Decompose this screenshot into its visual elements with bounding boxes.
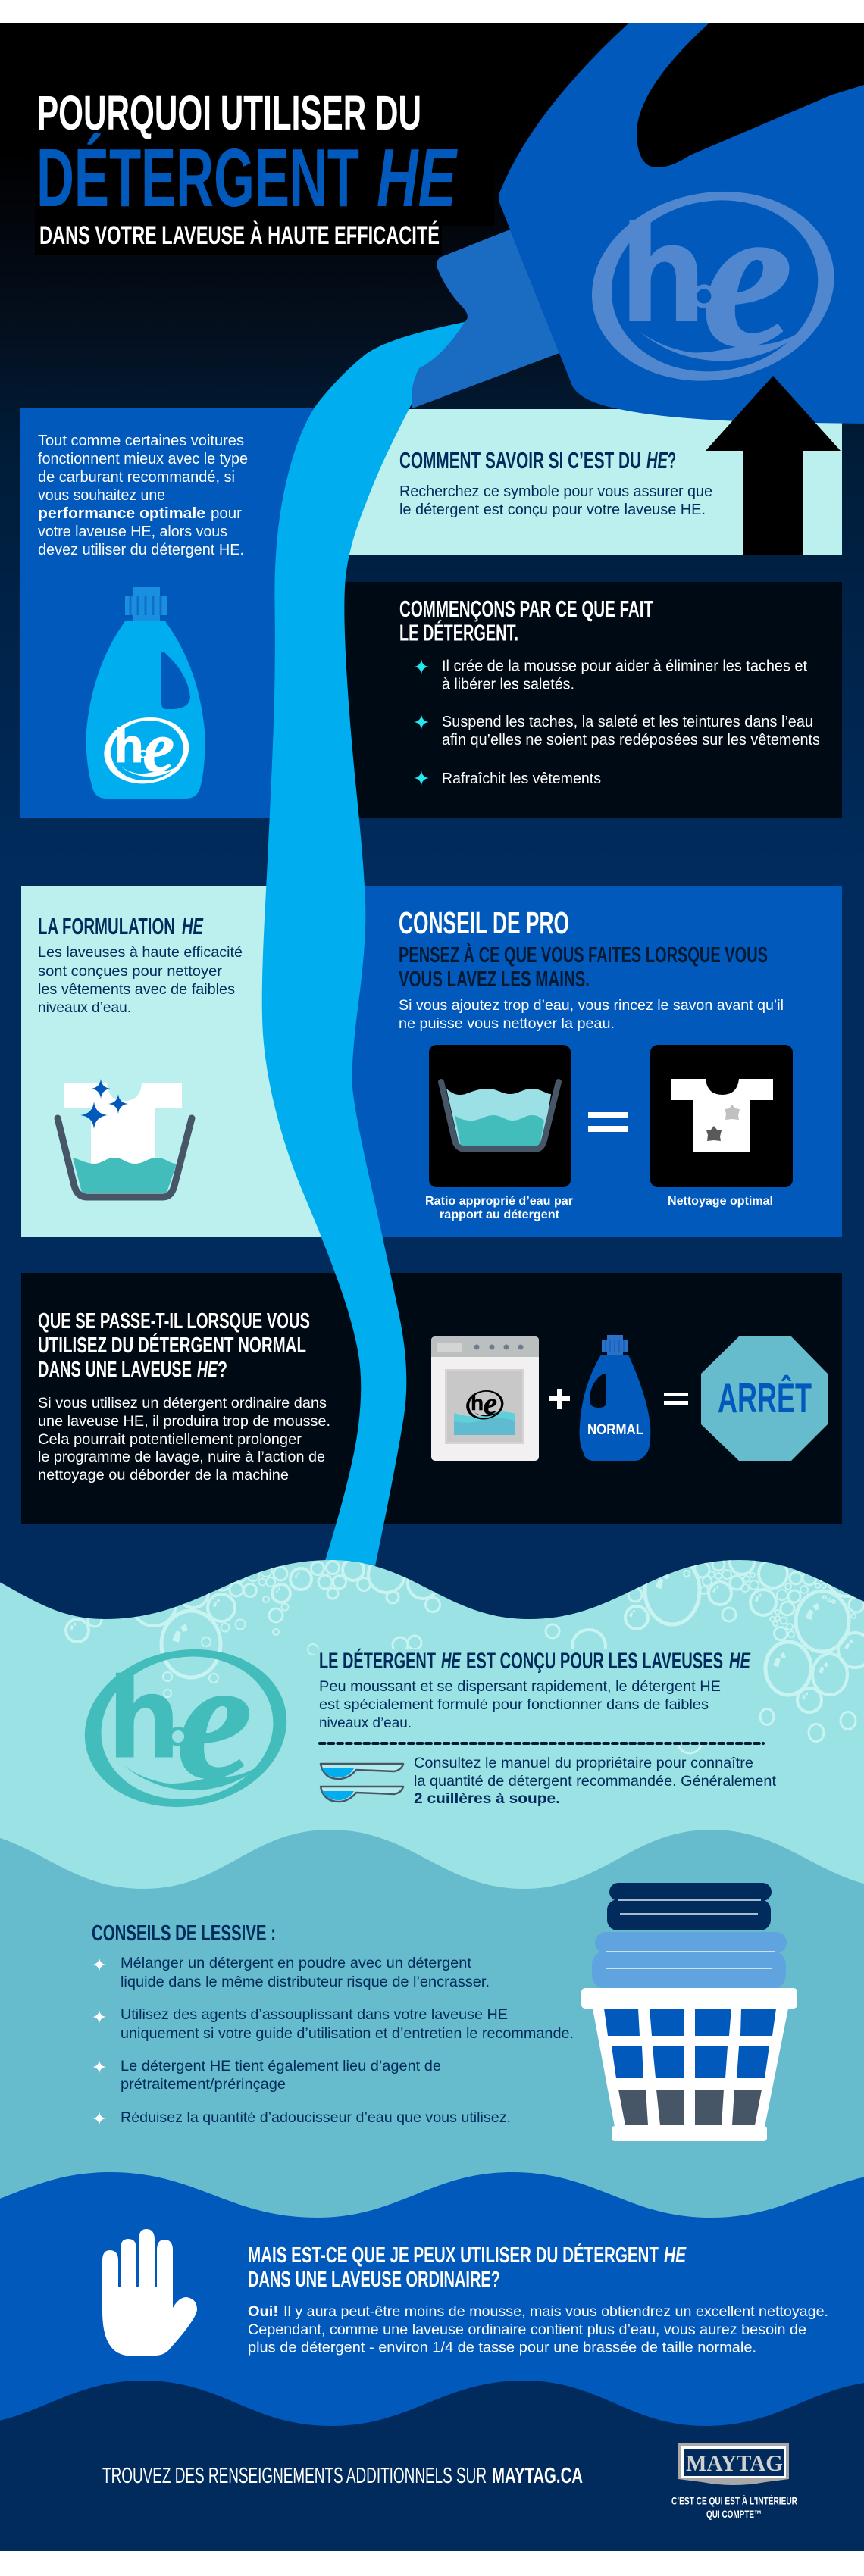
equals sign xyxy=(588,1112,628,1132)
wave: blue band xyxy=(0,2172,864,2440)
text: can I use HE in ordinary washer: Oui! xyxy=(248,2303,278,2320)
text: formulation: niveaux d’eau. xyxy=(38,999,131,1016)
text: normal detergent in HE washer: Cela pourrait potentiellement prolonger xyxy=(38,1431,302,1448)
icon: washer: e xyxy=(484,1386,497,1421)
bottle spout xyxy=(412,230,559,408)
text: how to know: HE xyxy=(646,447,668,474)
icon: small detergent bottle: h xyxy=(114,720,143,773)
text: formulation xyxy=(38,913,243,1016)
icon: raised hand xyxy=(102,2229,197,2356)
text: intro: performance optimale xyxy=(38,505,205,522)
text: can I use HE in ordinary washer: Il y aura peut-être moins de mousse, mais vous obtiendrez un excellent nettoyage. xyxy=(283,2303,828,2320)
title: HE xyxy=(377,132,458,224)
equals sign xyxy=(664,1393,688,1405)
text: laundry tips: Utilisez des agents d’assouplissant dans votre laveuse HE xyxy=(121,2006,508,2023)
text: HE detergent designed for HE washers: EST CONÇU POUR LES LAVEUSES xyxy=(466,1649,723,1674)
title xyxy=(35,86,494,255)
text: can I use HE in ordinary washer: DANS UNE LAVEUSE ORDINAIRE? xyxy=(248,2268,500,2292)
Maytag logo: MAYTAG xyxy=(686,2449,783,2476)
text: laundry tips: prétraitement/prérinçage xyxy=(121,2076,286,2093)
text: what the detergent does: Rafraîchit les vêtements xyxy=(442,771,601,787)
text: what the detergent does xyxy=(399,596,820,787)
panel: what detergent does xyxy=(333,582,842,818)
text: how to know: Recherchez ce symbole pour vous assurer que xyxy=(399,483,712,500)
captions xyxy=(425,1195,773,1221)
text: formulation: les vêtements avec de faibles xyxy=(38,981,235,998)
text: normal detergent in HE washer: ? xyxy=(218,1358,227,1382)
text: footer call to action: TROUVEZ DES RENSEIGNEMENTS ADDITIONNELS SUR xyxy=(102,2464,487,2488)
text: laundry tips: Mélanger un détergent en poudre avec un détergent xyxy=(121,1955,472,1971)
title: DÉTERGENT xyxy=(36,132,359,224)
icon: small detergent bottle xyxy=(86,587,205,799)
text: laundry tips: liquide dans le même distributeur risque de l’encrasser. xyxy=(121,1974,490,1990)
card: water ratio basin xyxy=(429,1045,571,1187)
captions: Nettoyage optimal xyxy=(668,1195,773,1208)
text: pro tip: VOUS LAVEZ LES MAINS. xyxy=(399,968,590,992)
text: intro: Tout comme certaines voitures xyxy=(38,433,244,449)
icon: large HE logo: h xyxy=(109,1653,179,1780)
panel: normal detergent dark xyxy=(21,1273,842,1524)
text: how to know: COMMENT SAVOIR SI C’EST DU xyxy=(399,447,641,474)
arrow pointing to symbol xyxy=(706,376,841,555)
text: tablespoons xyxy=(414,1755,777,1807)
text: can I use HE in ordinary washer: Cependant, comme une laveuse ordinaire contient plus d’eau, vous aurez besoin de xyxy=(248,2321,806,2338)
Maytag logo xyxy=(678,2443,789,2485)
text: pro tip: Si vous ajoutez trop d’eau, vous rincez le savon avant qu’il xyxy=(399,997,784,1014)
icon: washer xyxy=(431,1336,539,1461)
text: intro: votre laveuse HE, alors vous xyxy=(38,524,227,540)
icon: HE logo on large bottle: e xyxy=(702,163,793,389)
panel: formulation pale xyxy=(21,886,340,1237)
text: normal detergent in HE washer: QUE SE PASSE-T-IL LORSQUE VOUS xyxy=(38,1309,310,1333)
text: can I use HE in ordinary washer: plus de détergent - environ 1/4 de tasse pour une brassée de taille normale. xyxy=(248,2340,756,2356)
text: laundry tips: Le détergent HE tient également lieu d’agent de xyxy=(121,2058,441,2074)
text: normal detergent in HE washer: le programme de lavage, nuire à l’action de xyxy=(38,1449,325,1465)
text: intro: vous souhaitez une xyxy=(38,487,165,504)
text: HE detergent designed for HE washers: est spécialement formulé pour fonctionner dans de faibles xyxy=(319,1696,709,1713)
text: tablespoons: la quantité de détergent recommandée. Généralement xyxy=(414,1773,777,1790)
stop sign xyxy=(701,1336,828,1461)
text: normal detergent in HE washer: une laveuse HE, il produira trop de mousse. xyxy=(38,1413,330,1430)
text: HE detergent designed for HE washers: HE xyxy=(441,1649,462,1674)
text: can I use HE in ordinary washer: MAIS EST-CE QUE JE PEUX UTILISER DU DÉTERGENT xyxy=(248,2242,659,2268)
Maytag tagline: QUI COMPTE™ xyxy=(706,2508,762,2520)
text: intro: fonctionnent mieux avec le type xyxy=(38,451,248,467)
text: HE detergent designed for HE washers: LE DÉTERGENT xyxy=(319,1648,436,1674)
text: pro tip: CONSEIL DE PRO xyxy=(399,905,569,940)
panel: intro blue xyxy=(20,408,330,818)
text: intro: devez utiliser du détergent HE. xyxy=(38,542,244,558)
text: how to know: le détergent est conçu pour votre laveuse HE. xyxy=(399,502,706,518)
text: what the detergent does: afin qu’elles ne soient pas redéposées sur les vêtements xyxy=(442,732,820,749)
Maytag tagline xyxy=(671,2494,797,2520)
icon: normal detergent bottle xyxy=(580,1335,650,1461)
text: laundry tips: uniquement si votre guide d’utilisation et d’entretien le recommande. xyxy=(121,2025,574,2042)
text: HE detergent designed for HE washers: niveaux d’eau. xyxy=(319,1715,412,1731)
icon: laundry basket with folded clothes xyxy=(581,1883,797,2141)
icons: white sparkle bullets xyxy=(92,1958,106,2125)
text: normal detergent in HE washer xyxy=(38,1309,330,1483)
icon: HE logo on large bottle: h xyxy=(621,197,705,349)
text: pro tip xyxy=(399,905,784,1032)
Maytag tagline: C’EST CE QUI EST À L’INTÉRIEUR xyxy=(671,2494,797,2506)
text: can I use HE in ordinary washer xyxy=(248,2242,828,2356)
text backing block xyxy=(315,1649,758,1745)
text: intro xyxy=(38,433,248,558)
text: laundry tips: Réduisez la quantité d’adoucisseur d’eau que vous utilisez. xyxy=(121,2109,511,2126)
text: what the detergent does: COMMENÇONS PAR CE QUE FAIT xyxy=(399,596,653,622)
text: what the detergent does: Suspend les taches, la saleté et les teintures dans l’eau xyxy=(442,714,813,730)
soap wave xyxy=(0,1560,864,1894)
text: tablespoons: Consultez le manuel du propriétaire pour connaître xyxy=(414,1755,753,1771)
text: normal detergent in HE washer: Si vous utilisez un détergent ordinaire dans xyxy=(38,1395,327,1411)
text: laundry tips: CONSEILS DE LESSIVE : xyxy=(92,1921,276,1946)
text: normal detergent in HE washer: HE xyxy=(197,1358,218,1382)
bubbles xyxy=(66,1550,864,1753)
plus sign xyxy=(549,1389,570,1409)
text: formulation: Les laveuses à haute efficacité xyxy=(38,944,243,961)
panel: how to know pale xyxy=(333,409,842,555)
icons: cyan sparkle bullets xyxy=(414,659,429,786)
icon: large HE logo xyxy=(72,1624,299,1823)
captions: rapport au détergent xyxy=(440,1208,559,1221)
icon: large HE logo: e xyxy=(177,1624,252,1814)
text: formulation: sont conçues pour nettoyer xyxy=(38,963,223,980)
title: POURQUOI UTILISER DU xyxy=(37,86,421,140)
wave: footer xyxy=(0,2381,864,2551)
panel: pro tip blue xyxy=(333,886,842,1237)
wave: laundry tips band xyxy=(0,1830,864,2235)
text: what the detergent does: à libérer les saletés. xyxy=(442,676,574,692)
text: normal detergent in HE washer: nettoyage ou déborder de la machine xyxy=(38,1467,289,1483)
text: laundry tips xyxy=(92,1921,574,2126)
text: intro: de carburant recommandé, si xyxy=(38,469,235,486)
text: normal detergent in HE washer: UTILISEZ DU DÉTERGENT NORMAL xyxy=(38,1332,306,1358)
text: normal detergent in HE washer: DANS UNE LAVEUSE xyxy=(38,1358,192,1382)
icon: washer: h xyxy=(471,1391,484,1415)
text: tablespoons: 2 cuillères à soupe. xyxy=(414,1790,560,1807)
card: clean shirt xyxy=(650,1045,793,1187)
text: formulation: LA FORMULATION xyxy=(38,913,175,939)
text: HE detergent designed for HE washers: HE xyxy=(729,1649,751,1674)
text: what the detergent does: LE DÉTERGENT. xyxy=(399,620,518,646)
large pouring bottle xyxy=(499,23,864,424)
icon: small detergent bottle: e xyxy=(142,708,174,787)
text: HE detergent designed for HE washers: Peu moussant et se dispersant rapidement, le détergent HE xyxy=(319,1678,721,1695)
text: can I use HE in ordinary washer: HE xyxy=(664,2243,687,2268)
text: what the detergent does: Il crée de la mousse pour aider à éliminer les taches et xyxy=(442,658,807,674)
text: formulation: HE xyxy=(182,913,204,939)
title: DANS VOTRE LAVEUSE À HAUTE EFFICACITÉ xyxy=(39,221,440,250)
captions: Ratio approprié d’eau par xyxy=(425,1195,573,1208)
detergent stream xyxy=(262,318,470,1599)
icon: normal detergent bottle: NORMAL xyxy=(587,1422,643,1438)
text: intro: pour xyxy=(211,505,242,522)
icon: HE logo on large bottle xyxy=(577,163,850,399)
stop sign: ARRÊT xyxy=(718,1374,812,1421)
text: HE detergent designed for HE washers xyxy=(319,1648,751,1731)
icon: measuring spoons xyxy=(321,1764,403,1802)
text: footer call to action: MAYTAG.CA xyxy=(492,2464,583,2488)
text: pro tip: ne puisse vous nettoyer la peau. xyxy=(399,1015,615,1032)
text: how to know: ? xyxy=(668,447,676,474)
text: how to know xyxy=(399,447,712,518)
icon: shirt in basin with sparkles xyxy=(58,1079,192,1197)
